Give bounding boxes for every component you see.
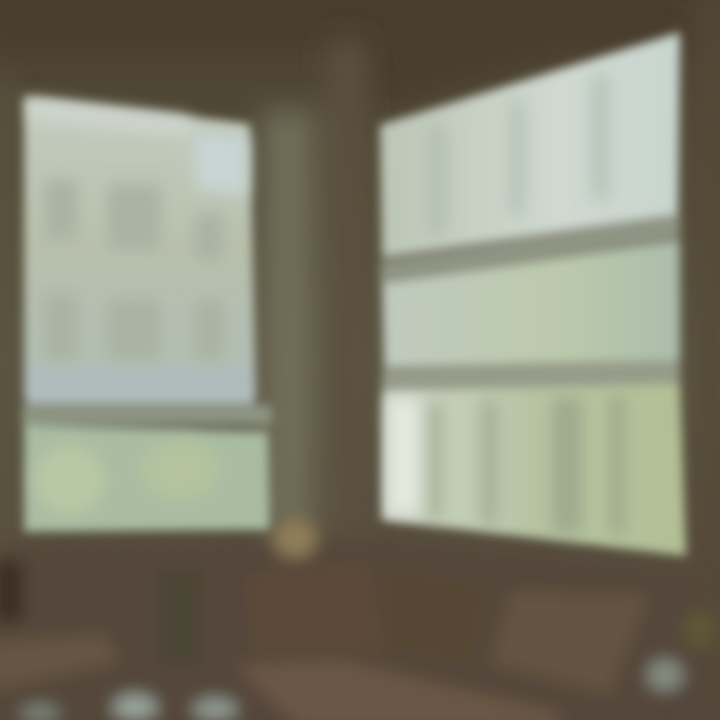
left window sky patch	[195, 132, 248, 196]
left window green lower pane	[24, 425, 270, 532]
ceiling shadow	[0, 0, 720, 110]
left window lower tier	[26, 368, 254, 404]
right window mullion lower	[382, 360, 680, 392]
bright lower left strip	[390, 400, 418, 512]
left window mullion	[22, 405, 272, 425]
lower slats	[428, 395, 624, 535]
left window building columns	[45, 180, 223, 360]
right window mullion upper	[380, 214, 680, 284]
sofa seat	[235, 660, 560, 720]
left window top bright band	[30, 100, 190, 135]
lamp glow	[273, 518, 317, 558]
right plant	[682, 610, 718, 650]
left window green patches	[35, 445, 105, 515]
right lamp	[647, 659, 683, 691]
sofa back cushions	[245, 560, 385, 655]
left window upper pane	[24, 96, 256, 400]
lower wall band	[0, 540, 720, 720]
right window lower pane	[382, 384, 686, 556]
left window details	[30, 100, 248, 515]
right window upper pane	[380, 32, 680, 258]
table items	[113, 694, 157, 720]
panel: sofa and foreground	[0, 518, 720, 720]
right window details	[390, 75, 624, 535]
side table	[0, 634, 120, 690]
plant shadow	[158, 570, 202, 665]
panel: right window	[380, 32, 686, 556]
panel: left window	[22, 96, 272, 532]
right window middle pane	[382, 240, 680, 368]
dark left object	[0, 560, 23, 622]
upper vertical shades	[430, 75, 608, 235]
